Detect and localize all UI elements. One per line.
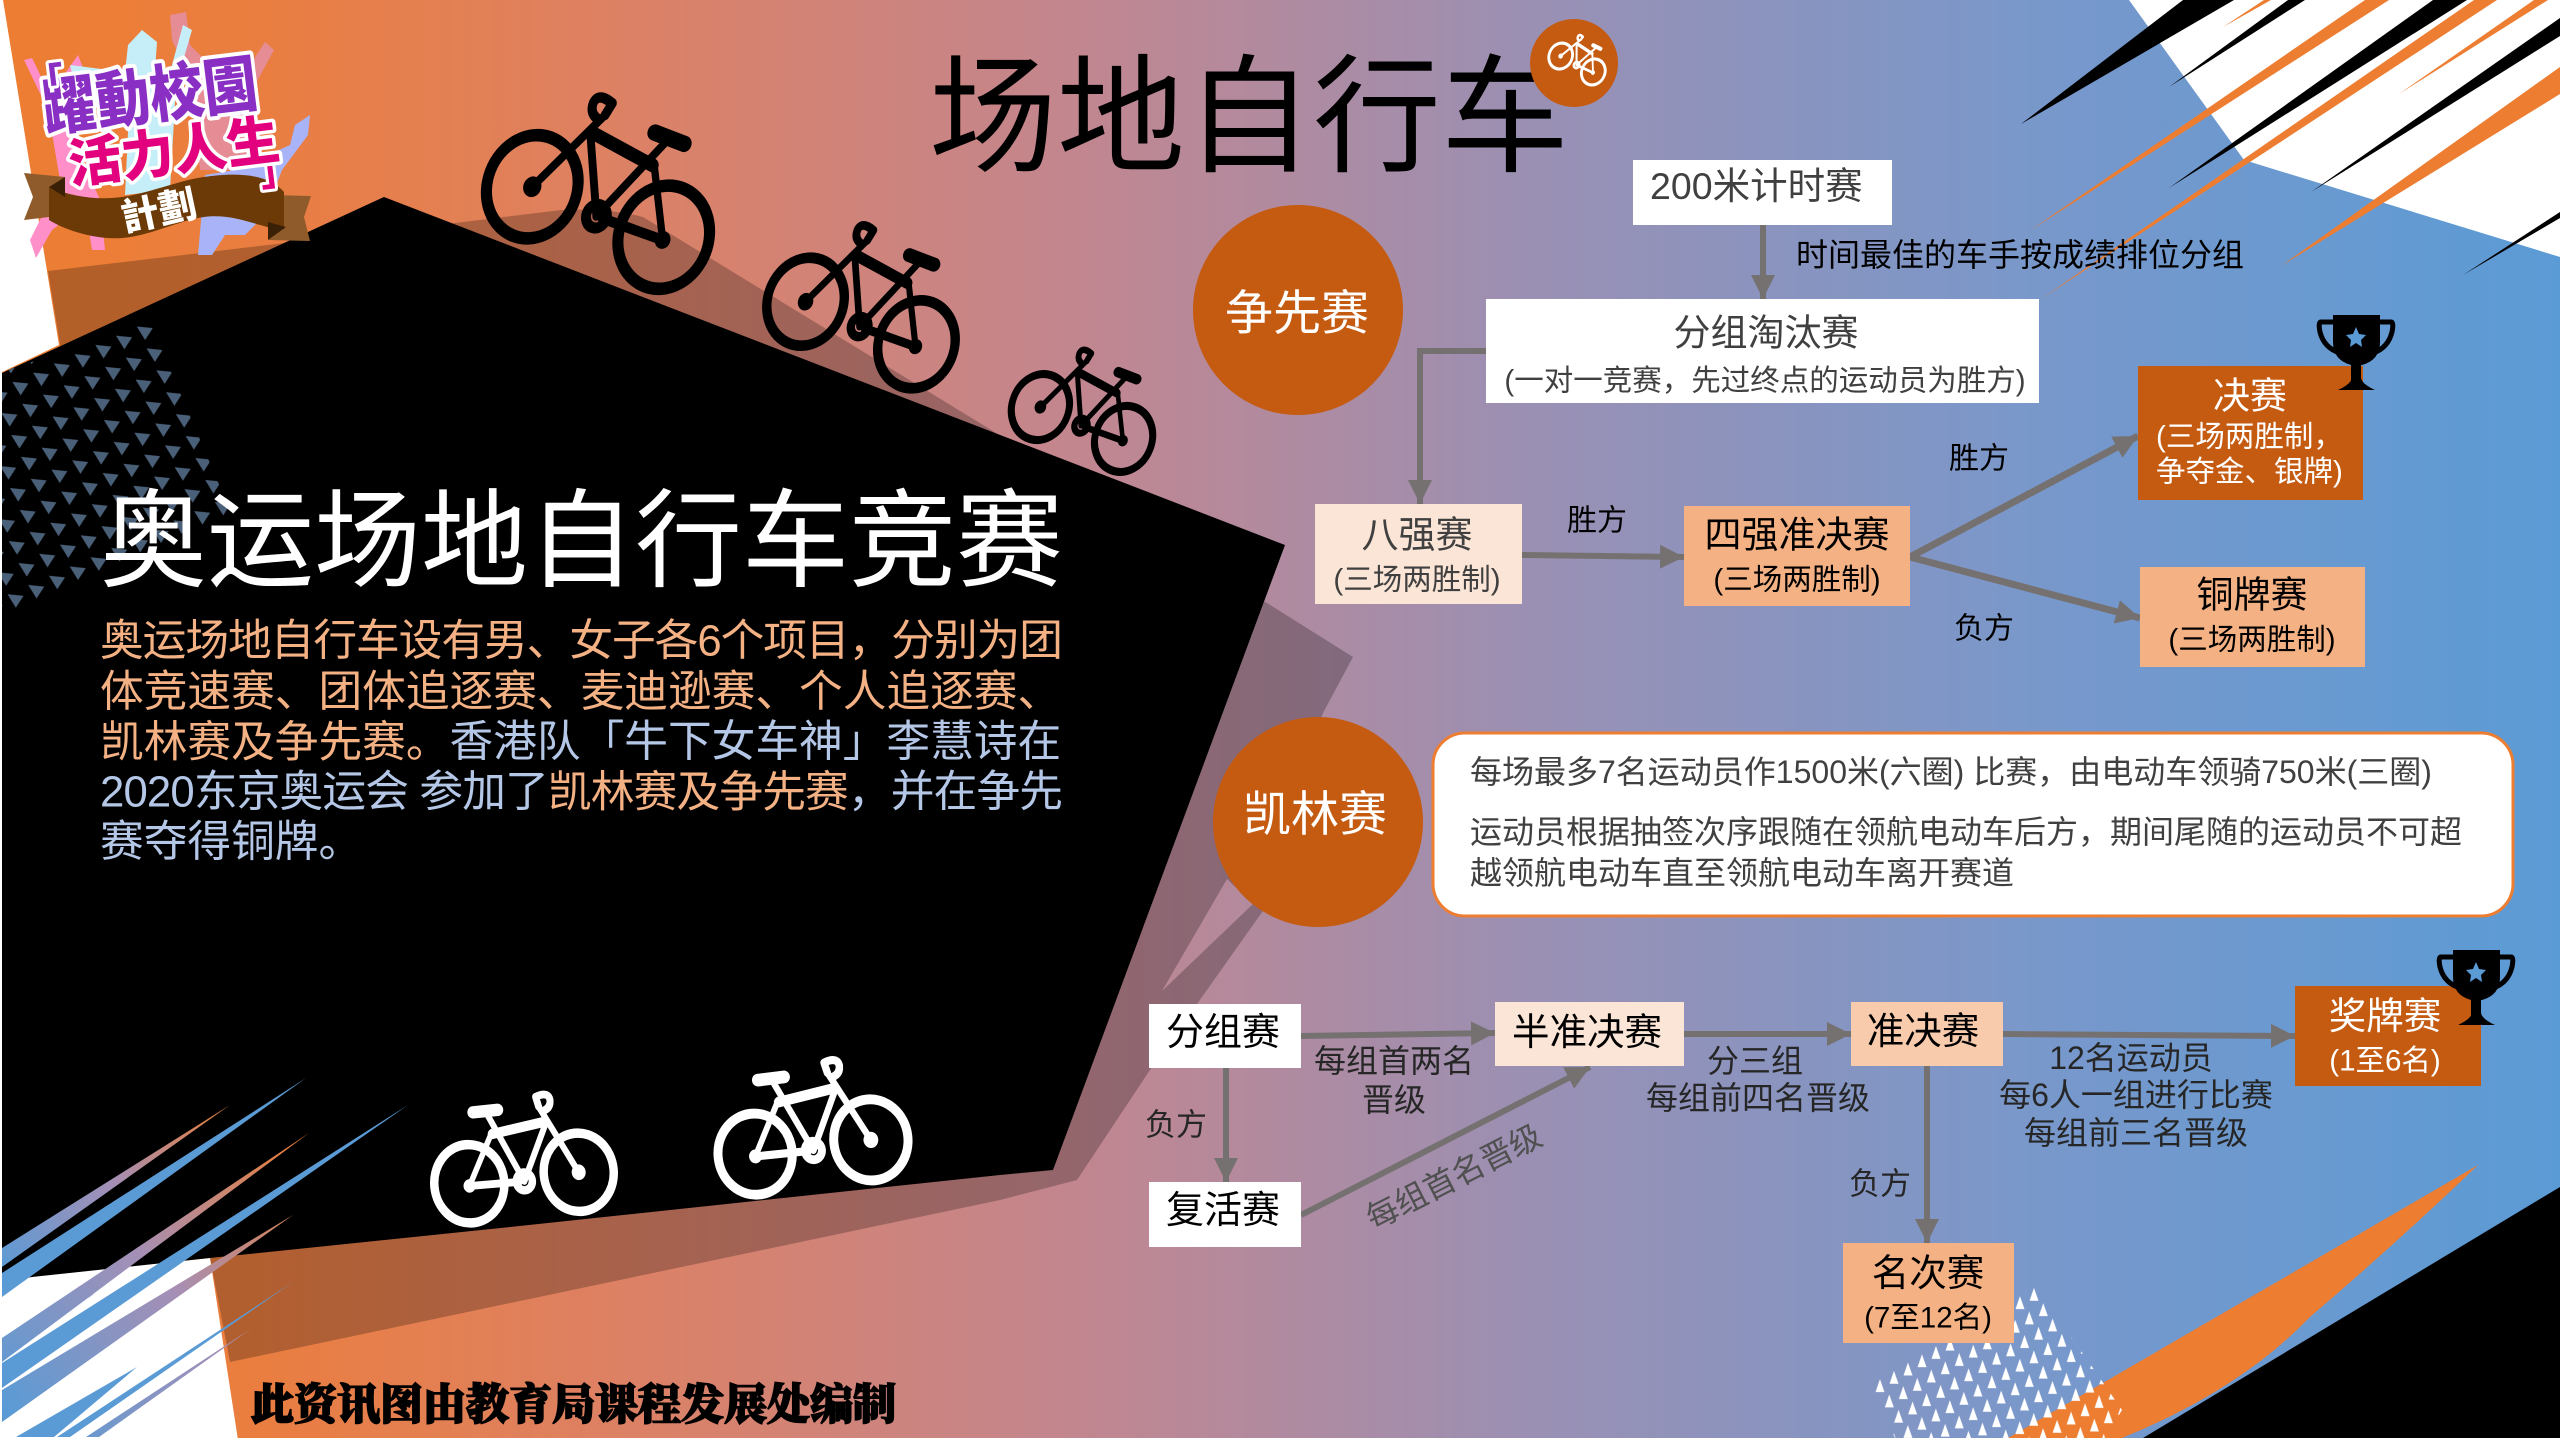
paragraph: 奥运场地自行车设有男、女子各6个项目，分别为团 [100,616,1063,666]
callout: keirin rules [1433,733,2513,916]
box: 决赛: 决赛 [2213,376,2287,416]
callout: keirin rules: 越领航电动车直至领航电动车离开赛道 [1470,855,2014,891]
label: 每组首两名晋级 [1314,1043,1474,1118]
arrow: group to semi-quarter [1301,1033,1495,1036]
box: 分组赛: 分组赛 [1166,1012,1280,1054]
icon: bike badge [1530,19,1618,107]
logo: 躍動校園活力人生計劃: 計劃 [117,184,201,240]
box: 分组淘汰赛 [1486,299,2039,403]
arrow: quarter to medal [2003,1034,2295,1036]
arrow: four to bronze [1910,557,2140,618]
label: 负方: 负方 [1954,612,2014,646]
box: 决赛: (三场两胜制， [2156,420,2343,454]
box: 半准决赛 [1495,1002,1684,1066]
label: 12名运动员: 每6人一组进行比赛 [1999,1077,2273,1113]
box: 奖牌赛 [2295,986,2481,1086]
box: 铜牌赛 [2140,567,2365,667]
arrow: eight to four [1522,555,1684,557]
triangle dot pattern white [1870,1283,2122,1438]
label: 胜方 upper: 胜方 [1949,442,2009,476]
arrow: 200m to group [1760,225,1766,299]
black bicycle large [472,69,744,302]
box: 铜牌赛: (三场两胜制) [2168,624,2336,656]
orange swoosh [2008,1165,2478,1438]
box: 名次赛: (7至12名) [1864,1302,1992,1334]
title: 场地自行车 [929,46,1569,190]
box: 决赛: 争夺金、银牌) [2156,456,2343,488]
box: 名次赛: 名次赛 [1872,1252,1984,1294]
footer credit: 此资讯图由教育局课程发展处编制 [251,1372,896,1432]
paragraph [100,616,1063,866]
paragraph: 赛夺得铜牌。 [100,818,362,866]
box: 铜牌赛: 铜牌赛 [2196,574,2308,616]
arrow: group to repechage [1223,1068,1229,1182]
white corner bottom left [0,1258,238,1440]
main black panel [2,197,1285,1282]
heading: left panel: 奥运场地自行车竞赛 [100,481,1063,601]
label: 时间最佳: 时间最佳的车手按成绩排位分组 [1796,237,2244,273]
black bicycle small [1002,332,1175,480]
white bicycle left [426,1088,618,1226]
box: 八强赛: (三场两胜制) [1333,564,1501,596]
black bicycle medium [754,202,985,400]
top right spikes [2021,0,2560,299]
box: 奖牌赛: (1至6名) [2329,1044,2441,1078]
arrow: semi to quarter [1684,1031,1851,1037]
callout: keirin rules: 运动员根据抽签次序跟随在领航电动车后方，期间尾随的运动员不可超 [1470,814,2462,850]
circle: 凯林赛: 凯林赛 [1243,788,1387,842]
label: 12名运动员: 每组前三名晋级 [2024,1115,2248,1151]
label: 分三组每组前四名晋级: 分三组 [1707,1043,1803,1079]
triangle dot pattern dark [2,322,232,612]
box: 200米计时赛: 200米计时赛 [1650,165,1863,207]
white bicycle right [708,1052,913,1199]
logo: 躍動校園活力人生計劃: 「 [26,59,66,105]
circle: 争先赛 [1193,205,1403,415]
label: 分三组每组前四名晋级 [1646,1043,1870,1116]
circle: 凯林赛 [1213,717,1423,927]
label: 负方 right: 负方 [1849,1166,1911,1202]
arrow: repechage to semi [1301,1067,1590,1215]
paragraph: 体竞速赛、团体追逐赛、麦迪逊赛、个人追逐赛、 [100,668,1061,716]
label: 分三组每组前四名晋级: 每组前四名晋级 [1646,1080,1870,1116]
bottom left spikes [2,1078,408,1437]
box: 复活赛: 复活赛 [1166,1190,1280,1232]
logo: 躍動校園活力人生計劃: 活力人生 [65,111,283,195]
box: 200米计时赛 [1633,160,1892,225]
paragraph: 2020东京奥运会 参加了凯林赛及争先赛，并在争先 [100,768,1063,816]
logo: 躍動校園活力人生計劃 [24,12,311,258]
icon: trophy final [2319,315,2393,390]
box: 八强赛: 八强赛 [1362,514,1472,556]
box: 分组赛 [1149,1004,1301,1068]
box: 八强赛 [1315,504,1522,604]
label: 12名运动员: 12名运动员 [2049,1040,2213,1076]
box: 四强准决赛: 四强准决赛 [1704,514,1890,556]
box: 分组淘汰赛: 分组淘汰赛 [1674,312,1858,354]
box: 半准决赛: 半准决赛 [1512,1011,1662,1053]
icon: trophy medal [2439,950,2513,1025]
label: 每组首两名晋级: 晋级 [1362,1082,1426,1118]
arrow: four to final [1910,436,2138,557]
box: 奖牌赛: 奖牌赛 [2329,995,2441,1037]
label: 每组首名晋级: 每组首名晋级 [1360,1117,1548,1237]
box: 决赛 [2138,366,2363,500]
box: 复活赛 [1149,1182,1301,1247]
box: 准决赛: 准决赛 [1867,1010,1979,1052]
box: 四强准决赛 [1684,506,1910,606]
logo: 躍動校園活力人生計劃: 躍動校園 [39,49,261,145]
white corner top right [2129,0,2560,257]
box: 四强准决赛: (三场两胜制) [1713,564,1881,596]
label: 每组首两名晋级: 每组首两名 [1314,1043,1474,1079]
circle: 争先赛: 争先赛 [1225,288,1369,340]
label: 胜方 lower: 胜方 [1567,504,1627,538]
label: 12名运动员 [1999,1040,2273,1151]
callout: keirin rules: 每场最多7名运动员作1500米(六圈) 比赛，由电动车领骑750米(三圈) [1470,754,2432,790]
black panel shadow [48,210,1353,1362]
box: 准决赛 [1851,1002,2003,1066]
paragraph: 凯林赛及争先赛。香港队「牛下女车神」李慧诗在 [100,718,1061,766]
box: 分组淘汰赛: (一对一竞赛，先过终点的运动员为胜方) [1504,364,2026,398]
bottom right black wedge [2143,1187,2560,1438]
arrow: group to eight [1420,351,1486,504]
logo: 躍動校園活力人生計劃: 」 [258,149,298,195]
box: 名次赛 [1843,1243,2014,1343]
arrow: quarter to ranking [1924,1066,1930,1243]
label: 负方 left: 负方 [1145,1108,1207,1142]
white corner top left [0,0,59,373]
